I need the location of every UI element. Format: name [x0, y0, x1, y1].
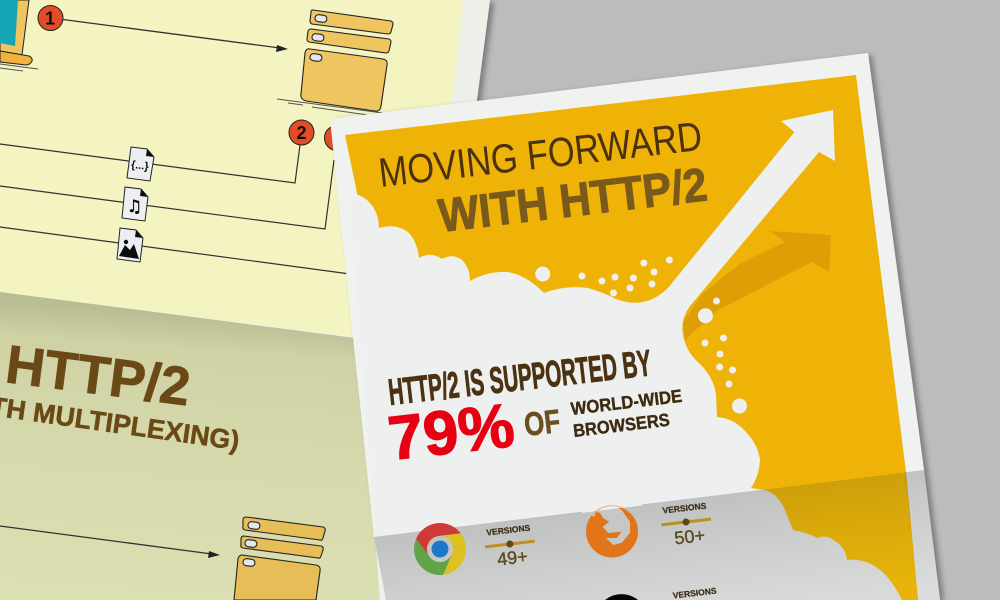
- title line 1: MOVING FORWARD: [376, 113, 704, 196]
- cloud and white arrow: [352, 110, 902, 600]
- slider: [661, 516, 711, 528]
- decorative dots: [535, 256, 747, 414]
- dark arrow: [683, 231, 831, 340]
- file icon: image: [117, 228, 143, 262]
- lower heading: HTTP/2: HTTP/2: [2, 334, 194, 417]
- firefox inner: [600, 509, 630, 545]
- chrome green sector: [406, 527, 459, 583]
- sheet lower fold shade: [374, 470, 940, 600]
- firefox versions: [659, 500, 714, 550]
- label: VERSIONS: [486, 523, 531, 538]
- support statement: HTTP/2 IS SUPPORTED BY: [386, 342, 653, 413]
- paper upper section: [0, 0, 463, 345]
- label: VERSIONS: [662, 501, 707, 516]
- lower yellow field: [700, 472, 918, 600]
- arrow: lower request: [0, 526, 220, 558]
- chrome center: [431, 540, 449, 558]
- slider: [485, 538, 535, 550]
- chrome yellow sector: [425, 526, 473, 580]
- chrome versions: [483, 522, 537, 571]
- firefox gap below fold: [588, 509, 614, 517]
- world-wide label: WORLD-WIDE: [570, 386, 683, 419]
- icon: firefox: [582, 495, 642, 558]
- file icon: code: {...}: [130, 159, 150, 173]
- big percentage: 79%: [385, 391, 518, 474]
- step 2 badge: 2: [296, 123, 307, 143]
- server icon bottom: [234, 517, 325, 600]
- firefox gap above fold: [582, 495, 642, 513]
- sheet paper: [330, 53, 940, 600]
- step 1 badge: [38, 6, 63, 30]
- icon: black browser: [605, 594, 638, 600]
- server icon top: [277, 10, 393, 115]
- step 2 badge: [289, 120, 314, 145]
- chrome red sector: [415, 520, 463, 558]
- laptop icon: [0, 0, 38, 71]
- title line 2: WITH HTTP/2: [435, 157, 710, 242]
- arrow: request to server: [63, 20, 288, 52]
- yellow field: [345, 75, 918, 600]
- step 3 badge: [324, 126, 350, 150]
- of label: OF: [522, 402, 562, 443]
- panel: front sheet: [330, 53, 940, 600]
- browsers label: BROWSERS: [572, 410, 671, 441]
- file icon: music: [122, 187, 148, 221]
- file icon: code: [127, 147, 154, 181]
- paper lower section: [0, 292, 395, 600]
- step 1 badge: 1: [45, 8, 55, 28]
- value: 49+: [496, 546, 529, 569]
- icon: chrome: [403, 519, 477, 585]
- connector lines: [0, 144, 350, 274]
- value: 50+: [673, 525, 706, 548]
- file icon: music: ♫: [127, 197, 142, 217]
- paper white margin: [0, 0, 490, 340]
- panel: back paper: [0, 0, 490, 600]
- firefox top outline: [593, 506, 630, 514]
